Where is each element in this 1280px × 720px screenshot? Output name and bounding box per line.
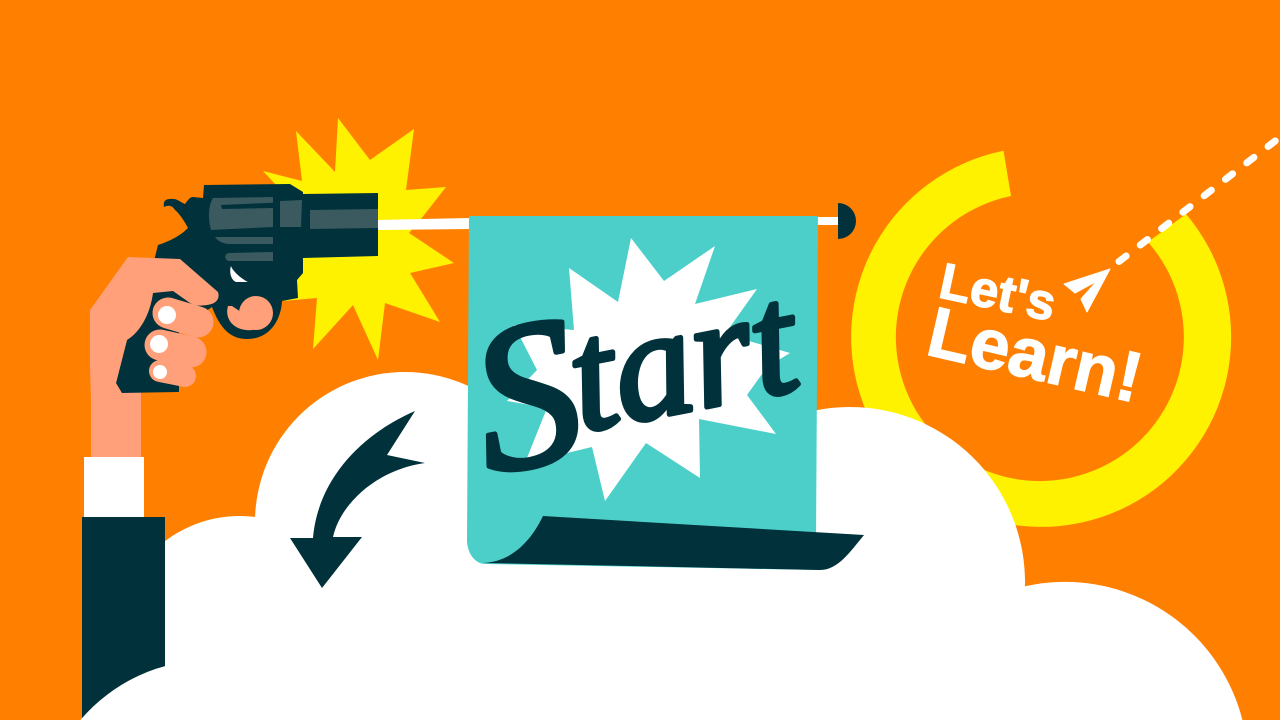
fingernail one (158, 306, 176, 324)
cloud (116, 372, 1242, 720)
finger two (160, 345, 191, 352)
white burst (507, 238, 790, 501)
shirt cuff (84, 457, 144, 517)
text: Let's: Let's (935, 252, 1061, 332)
fingernail two (150, 335, 168, 353)
cloud lump: lower right (888, 582, 1242, 720)
gun body (116, 184, 378, 393)
yellow progress ring (851, 151, 1231, 527)
palm and thumb (90, 257, 219, 400)
cloud lump: right (675, 407, 1025, 720)
groove highlight upper (215, 237, 273, 244)
arm (91, 360, 141, 457)
rod end cap (838, 203, 856, 239)
cloud body (165, 590, 1085, 720)
finger one (168, 313, 198, 322)
revolver (116, 184, 378, 393)
sleeve and cuff (82, 457, 165, 720)
curved arrow (290, 411, 425, 588)
rod: left section (378, 218, 470, 230)
icon: paper plane (1064, 269, 1110, 312)
heading: Let's Learn! (920, 252, 1150, 418)
rod: right section (816, 217, 840, 225)
fingernail three (153, 365, 167, 379)
cloud lump: left (116, 516, 364, 720)
dashed flight path (1119, 138, 1279, 262)
banner curled edge (483, 516, 864, 570)
banner sheet (467, 216, 820, 570)
cloud lump: bottom left (80, 660, 340, 720)
trigger fingertip (239, 296, 273, 330)
jacket sleeve (82, 517, 165, 720)
index finger crescent (227, 306, 256, 330)
flag rod (378, 217, 840, 230)
groove highlight lower (225, 252, 273, 261)
text: Learn!: Learn! (920, 293, 1150, 418)
finger three (160, 371, 185, 376)
cloud fill behind banner (480, 480, 880, 600)
text: Start: S (453, 271, 600, 519)
hand (90, 257, 273, 400)
cylinder highlight (209, 197, 273, 230)
cloud lump: upper left (255, 372, 555, 672)
frame highlight (280, 200, 302, 227)
barrel highlight (310, 209, 378, 229)
hammer glint (230, 266, 248, 282)
text: Start: tart (554, 250, 813, 465)
panel: Start banner (453, 216, 864, 570)
muzzle flash burst (263, 118, 454, 360)
